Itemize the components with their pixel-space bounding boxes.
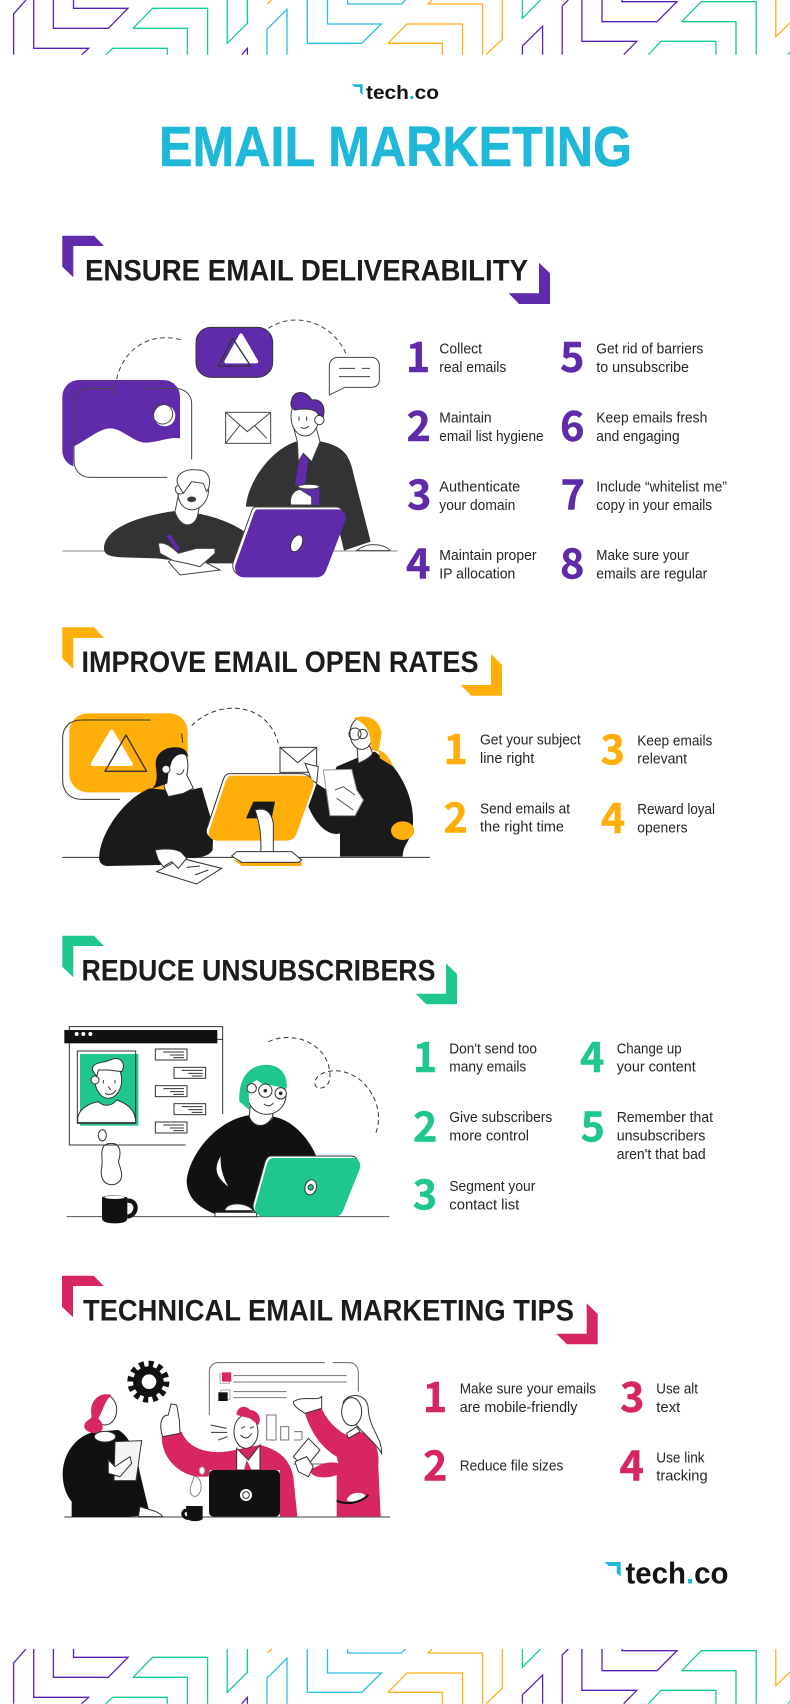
list item 2: 2 — [423, 1433, 448, 1493]
list item 2 — [406, 393, 544, 453]
list item 4: tracking — [656, 1469, 708, 1485]
panel: reduce unsubscribers — [62, 936, 713, 1223]
list item 7 — [560, 462, 727, 522]
list item 7: 7 — [560, 462, 585, 522]
heading corner top-left — [62, 236, 104, 277]
list item 3: Segment your — [449, 1179, 535, 1195]
list item 1: 1 — [413, 1024, 437, 1084]
list item 3: Authenticate — [439, 479, 520, 495]
list item 5: to unsubscribe — [596, 360, 689, 376]
heading: ENSURE EMAIL DELIVERABILITY — [85, 255, 528, 288]
list item 3: your domain — [439, 498, 515, 514]
list item 1 — [413, 1024, 537, 1084]
list item 1 — [443, 716, 581, 776]
list item 4 — [601, 785, 715, 845]
list item 4: 4 — [601, 785, 625, 845]
list item 3: 3 — [600, 716, 625, 776]
illustration: person at laptop with profile window — [64, 1027, 389, 1223]
panel: technical email marketing tips — [62, 1276, 708, 1521]
list item 1 — [406, 324, 506, 384]
list item 8: emails are regular — [596, 567, 707, 583]
heading: TECHNICAL EMAIL MARKETING TIPS — [83, 1295, 574, 1328]
bottom decorative pattern band — [14, 1649, 790, 1704]
title: EMAIL MARKETING — [159, 115, 632, 179]
list item 1: Collect — [439, 341, 482, 357]
list item 2: the right time — [480, 820, 564, 836]
illustration: team with laptop — [62, 320, 397, 577]
list item 1: 1 — [443, 716, 468, 776]
list item 5 — [581, 1093, 713, 1163]
list item 4: your content — [617, 1060, 696, 1076]
list item 3 — [407, 462, 520, 522]
list item 1: many emails — [449, 1060, 526, 1076]
list item 2: 2 — [413, 1093, 438, 1153]
list item 3 — [600, 716, 712, 776]
list item 4: Change up — [617, 1041, 682, 1057]
list item 5: unsubscribers — [617, 1128, 705, 1144]
illustration: team meeting with chart — [63, 1363, 390, 1521]
list item 5 — [560, 324, 703, 384]
list item 5: 5 — [560, 324, 584, 384]
list item 4: Reward loyal — [637, 802, 715, 818]
list item 1: are mobile-friendly — [460, 1400, 578, 1416]
list item 6: 6 — [560, 393, 584, 453]
list item 2: Send emails at — [480, 801, 570, 817]
list item 2: 2 — [406, 393, 431, 453]
list item 2: Maintain — [439, 410, 492, 426]
list item 2 — [413, 1093, 552, 1153]
list item 3: contact list — [449, 1197, 519, 1213]
list item 3: 3 — [407, 462, 432, 522]
list item 8: Make sure your — [596, 548, 689, 564]
logo: tech.co top: tech.co — [366, 82, 439, 104]
heading corner bottom-right — [509, 263, 550, 304]
list item 1: Don't send too — [449, 1041, 537, 1057]
list item 3: 3 — [620, 1364, 645, 1424]
list item 3: Keep emails — [637, 733, 712, 749]
list item 2 — [444, 785, 570, 845]
heading corner top-left — [62, 936, 104, 977]
list item 1: 1 — [423, 1364, 447, 1424]
list item 4: openers — [637, 820, 688, 836]
list item 4 — [406, 530, 537, 590]
heading corner bottom-right — [556, 1303, 598, 1344]
list item 2: Give subscribers — [449, 1110, 552, 1126]
heading: IMPROVE EMAIL OPEN RATES — [82, 646, 478, 679]
heading corner bottom-right — [461, 654, 502, 696]
list item 7: Include “whitelist me” — [596, 479, 727, 495]
panel: improve email open rates — [62, 627, 715, 884]
list item 4: Use link — [656, 1450, 705, 1466]
list item 4: 4 — [580, 1024, 605, 1084]
list item 4: IP allocation — [439, 567, 515, 583]
list item 2: Reduce file sizes — [460, 1458, 563, 1474]
list item 8 — [560, 530, 707, 590]
list item 1: 1 — [406, 324, 430, 384]
list item 4 — [580, 1024, 696, 1084]
list item 7: copy in your emails — [596, 498, 712, 514]
heading corner top-left — [62, 627, 104, 669]
list item 5: aren't that bad — [617, 1147, 706, 1163]
list item 3 — [413, 1162, 535, 1222]
list item 8: 8 — [560, 530, 584, 590]
list item 6: Keep emails fresh — [596, 410, 707, 426]
list item 2: email list hygiene — [439, 429, 544, 445]
list item 3: Use alt — [656, 1381, 698, 1397]
heading corner bottom-right — [416, 963, 457, 1004]
list item 2 — [423, 1433, 563, 1493]
list item 1: real emails — [439, 360, 506, 376]
top decorative pattern band — [14, 0, 790, 55]
list item 4: 4 — [406, 530, 431, 590]
list item 3: relevant — [637, 752, 687, 768]
list item 4 — [620, 1433, 708, 1493]
list item 1: Get your subject — [480, 733, 581, 749]
list item 1: Make sure your emails — [460, 1382, 596, 1398]
list item 2: more control — [449, 1128, 529, 1144]
list item 1 — [423, 1364, 596, 1424]
list item 4: 4 — [620, 1433, 644, 1493]
list item 6 — [560, 393, 707, 453]
list item 1: line right — [480, 751, 534, 767]
heading: REDUCE UNSUBSCRIBERS — [82, 955, 436, 988]
heading corner top-left — [62, 1276, 104, 1317]
panel: ensure email deliverability — [62, 236, 727, 590]
list item 3: 3 — [413, 1162, 437, 1222]
list item 3: text — [656, 1400, 680, 1416]
list item 4: Maintain proper — [439, 548, 537, 564]
list item 2: 2 — [444, 785, 468, 845]
list item 6: and engaging — [596, 429, 680, 445]
list item 5: 5 — [581, 1093, 605, 1153]
list item 5: Get rid of barriers — [596, 341, 703, 357]
logo: tech.co bottom: tech.co — [626, 1555, 728, 1590]
list item 5: Remember that — [617, 1110, 713, 1126]
list item 3 — [620, 1364, 698, 1424]
illustration: colleagues at monitor — [62, 708, 430, 884]
